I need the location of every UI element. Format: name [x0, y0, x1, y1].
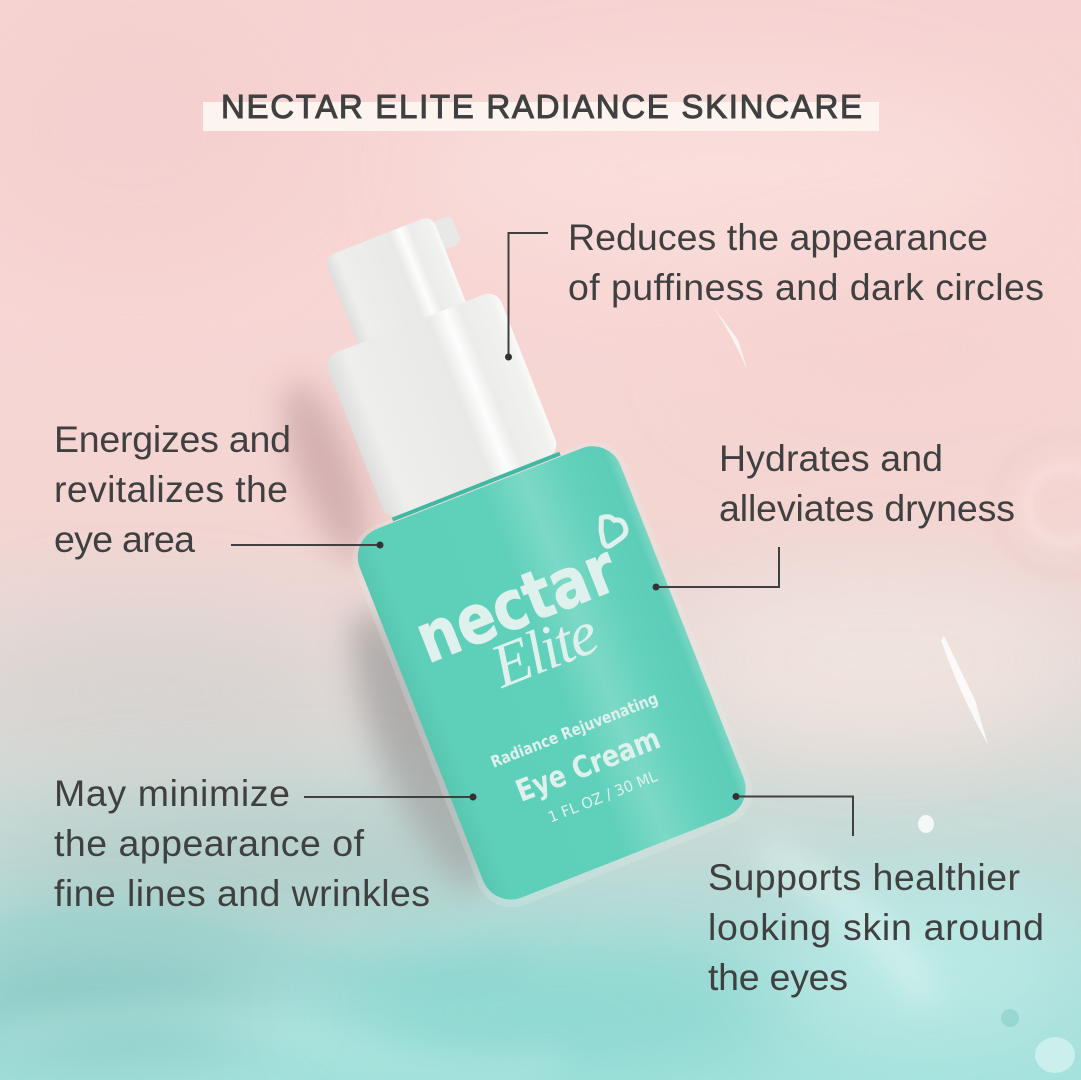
- benefit: fine lines and wrinkles: the appearance of: [54, 822, 365, 864]
- benefit: healthier skin: [708, 793, 1044, 998]
- benefit: puffiness and dark circles: [505, 216, 1044, 360]
- benefit: fine lines and wrinkles: [54, 772, 476, 914]
- benefit: healthier skin: looking skin around: [708, 906, 1044, 948]
- benefit: puffiness and dark circles: of puffiness and dark circles: [568, 266, 1044, 308]
- benefit: hydrates: [652, 437, 1015, 590]
- bottle body: [347, 433, 755, 908]
- benefit: hydrates: Hydrates and: [719, 437, 943, 479]
- bottle collar: [323, 289, 561, 520]
- benefit: fine lines and wrinkles: fine lines and wrinkles: [54, 872, 430, 914]
- benefit: energizes: [54, 418, 384, 560]
- bottle cap and nozzle: [324, 208, 486, 353]
- benefit: puffiness and dark circles: Reduces the appearance: [568, 216, 988, 258]
- product name: [488, 689, 687, 839]
- benefit: energizes: eye area: [54, 518, 195, 560]
- benefit: energizes: Energizes and: [54, 418, 291, 460]
- product: eye cream bottle: [244, 182, 763, 918]
- benefit: hydrates: alleviates dryness: [719, 487, 1015, 529]
- benefit: healthier skin: the eyes: [708, 956, 848, 998]
- brand logo: nectar: nectar: [405, 530, 628, 679]
- benefit: fine lines and wrinkles: May minimize: [54, 772, 290, 814]
- title: NECTAR ELITE RADIANCE SKINCARE: [221, 88, 862, 125]
- product name: Radiance Rejuvenating: [488, 689, 661, 772]
- benefit: healthier skin: Supports healthier: [708, 856, 1020, 898]
- brand script: Elite: Elite: [481, 598, 608, 702]
- product name: 1 FL OZ / 30 ML: [545, 767, 661, 826]
- product name: Eye Cream: [511, 721, 665, 810]
- benefit: energizes: revitalizes the: [54, 468, 288, 510]
